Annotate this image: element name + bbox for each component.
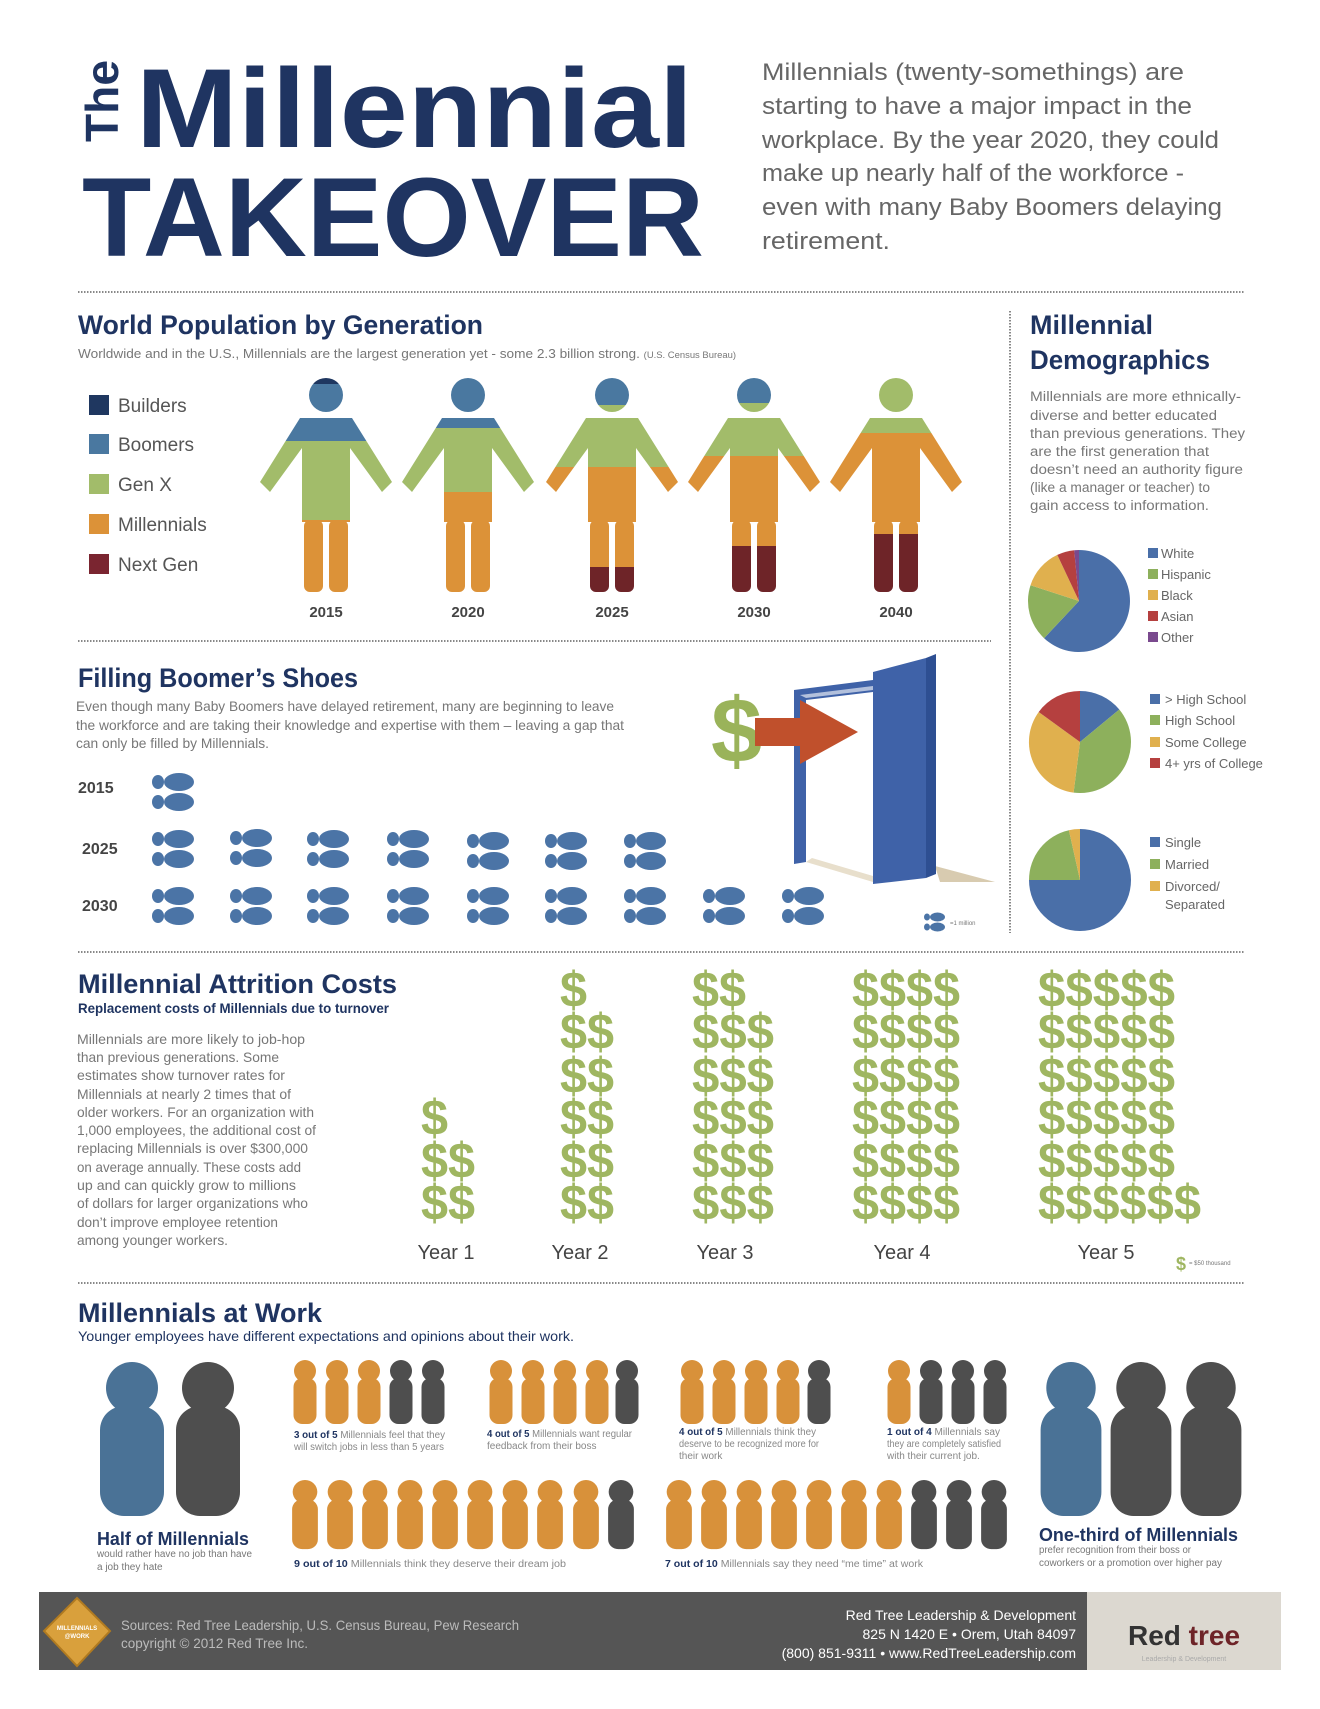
callout: one-third of millennials: One-third of Millennials [1039,1525,1238,1545]
stat: 3 of 5: 3 out of 5 Millennials feel that they [294,1430,445,1441]
dollar chart: $ [421,1090,448,1146]
panel: attrition costs [77,962,1231,1274]
dollar chart: $$$$ [852,1004,960,1060]
icon: badge: MILLENNIALS [57,1626,97,1632]
dollar chart: $$$$$$ [1038,1175,1201,1231]
title [76,46,704,280]
dollar chart: $$ [560,1004,614,1060]
subtitle: Worldwide and in the U.S., Millennials are the largest generation yet - some 2.3 billion strong. (U.S. Census Bureau) [78,346,736,361]
dollar chart: $$ [560,1090,614,1146]
text: Millennials are more likely to job-hop [77,1031,305,1047]
legend: $ = $50 thousand: = $50 thousand [1189,1261,1231,1267]
legend: marital: Divorced/ [1165,879,1220,894]
heading: World Population by Generation [78,310,483,340]
legend: Gen X [118,475,172,496]
text: are the first generation that [1030,444,1209,459]
year labels: 2025 [595,604,629,621]
panel: demographics [1028,310,1263,931]
footer [39,1592,1281,1670]
heading: Millennials at Work [78,1298,323,1328]
dollar chart [421,962,1201,1231]
legend: ethnicity: Hispanic [1161,567,1211,582]
figure 2015 [256,378,396,600]
title: TAKEOVER [82,155,704,280]
year labels [309,604,913,621]
stat: 1 of 4 [886,1360,1006,1462]
logo: Leadership & Development [1142,1656,1226,1663]
text: diverse and better educated [1030,408,1217,423]
year labels: 2030 [737,604,771,621]
subtitle: Replacement costs of Millennials due to turnover [78,1000,390,1016]
dollar chart: $$ [692,962,746,1018]
legend: Millennials [118,515,207,536]
dollar chart: $$$$ [852,1133,960,1189]
icon: badge [44,1598,110,1666]
text: Millennials at nearly 2 times that of [77,1086,291,1102]
subtitle: Younger employees have different expectations and opinions about their work. [78,1328,574,1344]
intro text: workplace. By the year 2020, they could [761,127,1219,154]
year labels: 2015 [309,604,343,621]
heading [1030,310,1210,375]
dollar chart: $ [560,962,587,1018]
dollar chart: $$$ [692,1004,774,1060]
year labels: 2020 [451,604,485,621]
legend [89,395,207,576]
callout: half of millennials: a job they hate [97,1562,163,1573]
text: doesn’t need an authority figure [1030,462,1243,477]
arrow [755,700,858,764]
figure 2040 [826,378,966,600]
title: Millennial [136,46,693,171]
dollar chart: $$$$ [852,1090,960,1146]
stat: 4 of 5 recognized: deserve to be recognized more for [679,1439,820,1450]
text: (like a manager or teacher) to [1030,480,1210,495]
figure 2025 [542,378,682,600]
stat: 3 of 5: will switch jobs in less than 5 years [293,1442,444,1453]
stat: 4 of 5 recognized [679,1360,830,1462]
text: 1,000 employees, the additional cost of [77,1122,316,1138]
legend: ethnicity: Asian [1161,609,1194,624]
sources: copyright © 2012 Red Tree Inc. [121,1635,308,1651]
text: Even though many Baby Boomers have delayed retirement, many are beginning to leave [76,698,614,714]
row labels: 2015 [78,780,114,797]
title: The [76,60,128,142]
icon: badge: @WORK [65,1634,90,1640]
text: Millennials are more ethnically- [1030,389,1241,404]
callout: one-third of millennials: coworkers or a promotion over higher pay [1039,1558,1222,1569]
text: can only be filled by Millennials. [76,735,269,751]
text [1030,389,1245,513]
figure 2020 [398,378,538,600]
legend: ethnicity: White [1161,546,1194,561]
stat: 4 of 5 recognized: 4 out of 5 Millennials think they [679,1427,816,1438]
text: than previous generations. Some [77,1049,279,1065]
callout: half of millennials [96,1529,252,1573]
heading: Filling Boomer’s Shoes [78,663,358,693]
legend: education: 4+ yrs of College [1165,756,1263,771]
text: up and can quickly grow to millions [77,1177,296,1193]
contact: (800) 851-9311 • www.RedTreeLeadership.com [782,1645,1076,1661]
row labels: 2030 [82,898,118,915]
stat: 4 of 5 recognized: their work [679,1451,723,1462]
legend: shoe = 1 million [924,912,976,932]
text [77,1031,316,1248]
legend: marital: Single [1165,835,1201,850]
contact: Red Tree Leadership & Development [846,1607,1076,1623]
contact [782,1607,1076,1661]
legend: ethnicity: Black [1161,588,1193,603]
text [76,698,624,751]
stat: 1 of 4: with their current job. [886,1451,980,1462]
callout: half of millennials: Half of Millennials [97,1529,249,1549]
contact: 825 N 1420 E • Orem, Utah 84097 [863,1626,1076,1642]
heading: Millennial [1030,310,1153,340]
dollar chart: $$$$$ [1038,1133,1175,1189]
row labels [78,780,118,915]
text: on average annually. These costs add [77,1159,301,1175]
year labels [417,1242,1135,1264]
legend: education: Some College [1165,735,1247,750]
intro text: starting to have a major impact in the [762,93,1192,120]
year labels: Year 4 [873,1242,931,1264]
sources: Sources: Red Tree Leadership, U.S. Census Bureau, Pew Research [121,1617,519,1633]
shoe rows [152,773,824,925]
heading: Demographics [1030,345,1210,375]
heading: Millennial Attrition Costs [78,969,397,999]
row labels: 2025 [82,841,118,858]
dollar chart: $$$ [692,1133,774,1189]
stat: 7 of 10: 7 out of 10 Millennials say they need “me time” at work [665,1559,924,1570]
big figures right [1041,1362,1241,1516]
legend: $ = $50 thousand: $ [1176,1254,1186,1274]
legend: marital [1150,835,1225,912]
pie: marital [1029,829,1131,931]
year labels: Year 3 [696,1242,754,1264]
stat: 4 of 5 feedback: feedback from their boss [487,1441,596,1452]
stat: 3 of 5 [293,1360,445,1453]
intro text: Millennials (twenty-somethings) are [762,59,1184,86]
stat: 4 of 5 feedback: 4 out of 5 Millennials want regular [487,1429,633,1440]
year labels: Year 1 [417,1242,475,1264]
legend: Boomers [118,435,194,456]
pie: education [1029,691,1131,793]
dollar chart: $$ [421,1175,475,1231]
dollar chart: $$ [421,1133,475,1189]
legend: marital: Separated [1165,897,1225,912]
intro text: make up nearly half of the workforce - [762,160,1184,187]
sources [121,1617,519,1651]
intro text: retirement. [762,228,890,255]
dollar chart: $$$$$ [1038,1048,1175,1104]
figure 2030 [684,378,824,600]
dollar chart: $$$ [692,1175,774,1231]
dollar chart: $$ [560,1133,614,1189]
dollar chart: $$$$$ [1038,962,1175,1018]
legend: $ = $50 thousand [1176,1254,1231,1274]
stat: 4 of 5 feedback [487,1360,638,1452]
intro text: even with many Baby Boomers delaying [762,194,1222,221]
text: than previous generations. They [1030,426,1245,441]
year labels: 2040 [879,604,913,621]
legend: Builders [118,396,187,417]
text: older workers. For an organization with [77,1104,314,1120]
intro text [761,59,1222,255]
dollar chart: $$$ [692,1090,774,1146]
legend: ethnicity: Other [1161,630,1194,645]
year labels: Year 5 [1077,1242,1135,1264]
dollar chart: $$$$ [852,962,960,1018]
dollar chart: $$ [560,1175,614,1231]
legend: marital: Married [1165,857,1209,872]
text: gain access to information. [1030,498,1209,513]
stat: 1 of 4: they are completely satisfied [887,1439,1001,1450]
panel: millennials at work [78,1298,1241,1573]
legend: ethnicity [1148,546,1211,645]
dollar chart: $$$$ [852,1048,960,1104]
dollar chart: $$$$$ [1038,1004,1175,1060]
callout: one-third of millennials: prefer recognition from their boss or [1039,1545,1192,1556]
text: estimates show turnover rates for [77,1067,285,1083]
legend: Next Gen [118,555,198,576]
text: of dollars for larger organizations who [77,1195,308,1211]
year labels: Year 2 [551,1242,609,1264]
text: among younger workers. [77,1232,228,1248]
legend: shoe = 1 million: =1 million [950,921,976,927]
stat: 9 of 10 [292,1480,634,1570]
legend: education: > High School [1165,692,1246,707]
dollar chart: $$ [560,1048,614,1104]
dollar chart: $$$ [692,1048,774,1104]
callout: one-third of millennials [1039,1525,1238,1569]
text: replacing Millennials is over $300,000 [77,1140,308,1156]
panel: filling boomer's shoes [76,654,995,932]
dollar chart: $$$$$ [1038,1090,1175,1146]
big figures left [100,1362,240,1516]
panel: world population [78,310,966,621]
stat: 7 of 10 [665,1480,1007,1570]
stat: 9 of 10: 9 out of 10 Millennials think they deserve their dream job [294,1559,566,1570]
icon: door [794,654,995,884]
dollar chart: $$$$ [852,1175,960,1231]
callout: half of millennials: would rather have no job than have [96,1549,252,1560]
legend: education: High School [1165,713,1235,728]
icon: dollar: $ [711,680,762,782]
text: don’t improve employee retention [77,1214,278,1230]
text: the workforce and are taking their knowledge and expertise with them – leaving a gap that [76,717,624,733]
logo: Red tree [1128,1620,1240,1651]
legend: education [1150,692,1263,771]
stat: 1 of 4: 1 out of 4 Millennials say [887,1427,1000,1438]
pie: ethnicity [1028,550,1130,652]
